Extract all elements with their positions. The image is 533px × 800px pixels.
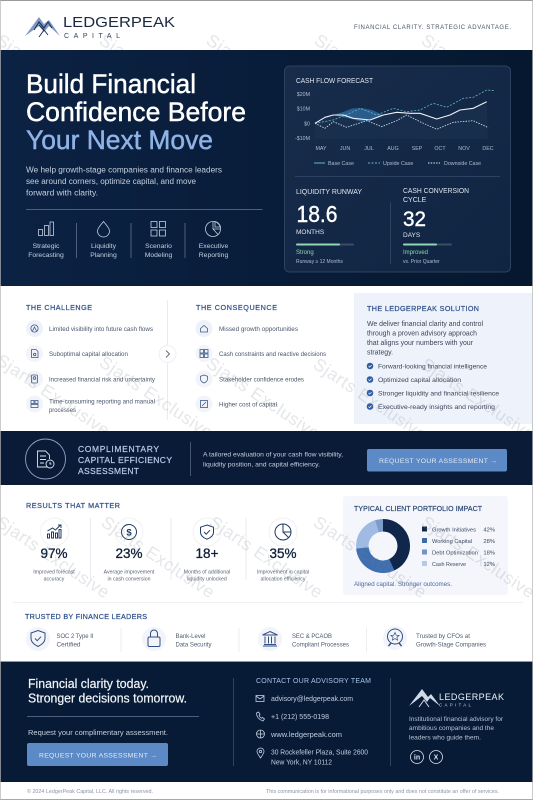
watermark: Sjarts Exclusive (206, 512, 326, 602)
panel: hero (0, 50, 533, 286)
legend: 18% (483, 550, 495, 556)
legend: scenarios: Base Case (328, 161, 354, 167)
feature: executive reporting (199, 222, 228, 259)
legend: 28% (483, 539, 495, 545)
logo (25, 14, 175, 40)
list: challenges: Suboptimal capital allocation (49, 351, 128, 358)
legend: 12% (483, 562, 495, 568)
feature: scenario modeling: Scenario (145, 243, 172, 250)
stat: 97%: Improved forecast (33, 570, 75, 576)
list: challenges: Limited visibility into future cash flows (49, 326, 154, 333)
contact details: advisory@ledgerpeak.com (271, 694, 353, 703)
stat: 35% (257, 518, 309, 582)
watermark (0, 30, 533, 602)
feature: liquidity planning (90, 222, 117, 259)
line chart: cash flow (295, 90, 495, 152)
watermark: Sjarts Exclusive (96, 30, 216, 120)
heading: trusted: TRUSTED BY FINANCE LEADERS (25, 612, 147, 621)
metric: cash conversion cycle: CASH CONVERSION (403, 188, 469, 195)
panel: assessment band (0, 431, 533, 485)
feature: scenario modeling: Modeling (145, 252, 173, 259)
line chart: cash flow: AUG (387, 146, 399, 152)
heading: the consequence: THE CONSEQUENCE (196, 303, 277, 312)
logo: LEDGERPEAK (63, 14, 175, 31)
title: Build Financial (26, 69, 196, 99)
intro text (26, 166, 222, 198)
heading: portfolio: TYPICAL CLIENT PORTFOLIO IMPACT (354, 506, 483, 513)
contact details: 30 Rockefeller Plaza, Suite 2600 (271, 748, 368, 756)
list: challenges: Time-consuming reporting and manual (49, 398, 156, 406)
stat: 18+ (184, 518, 230, 582)
stat: 23%: 23% (115, 546, 143, 561)
contact details: +1 (212) 555-0198 (271, 712, 329, 721)
list: solution benefits (367, 363, 499, 411)
social icons: in (414, 754, 420, 762)
metric: cash conversion cycle: CYCLE (403, 197, 427, 204)
call to action text: Request your complimentary assessment. (28, 730, 168, 737)
button: request assessment: REQUEST YOUR ASSESSMENT → (379, 458, 497, 465)
feature: scenario modeling (145, 222, 173, 259)
list: solution benefits: Stronger liquidity and financial resilience (378, 390, 499, 398)
contact details: CONTACT OUR ADVISORY TEAM (256, 678, 371, 685)
line chart: cash flow: NOV (458, 146, 470, 152)
stat: 35%: allocation efficiency (261, 576, 306, 582)
list: challenges: Increased financial risk and uncertainty (49, 376, 156, 384)
legend: 42% (483, 528, 495, 534)
stat: 97%: 97% (40, 546, 68, 561)
feature: liquidity planning: Liquidity (91, 243, 117, 250)
line chart: cash flow: SEP (412, 146, 423, 152)
text: solution description: that aligns your numbers with your (367, 340, 474, 347)
line chart: cash flow: JUL (364, 146, 374, 152)
watermark: Sjarts Exclusive (96, 352, 216, 442)
contact details: www.ledgerpeak.com (270, 730, 342, 739)
footer logo: LEDGERPEAK (439, 692, 504, 702)
list: challenges: processes (49, 407, 77, 414)
footer logo (409, 689, 504, 708)
panel: portfolio impact (343, 496, 508, 595)
title: Your Next Move (26, 125, 213, 155)
bottom legal bar: This communication is for informational purposes only and does not constitute an offer of services. (266, 789, 499, 795)
metric: cash conversion cycle (403, 188, 469, 265)
watermark: Sjarts Exclusive (203, 353, 323, 443)
metric: liquidity runway: Strong (296, 250, 314, 256)
feature: liquidity planning: Planning (90, 252, 117, 259)
footer logo: CAPITAL (439, 702, 471, 708)
legend: scenarios (314, 161, 481, 167)
watermark: Sjarts Exclusive (310, 512, 430, 602)
caption: Aligned capital. Stronger outcomes. (354, 582, 452, 588)
contact details (256, 678, 371, 766)
panel: trusted by finance leaders (13, 602, 523, 652)
metric: liquidity runway (296, 189, 362, 265)
stat: 23%: Average improvement (104, 570, 155, 576)
title (26, 69, 246, 155)
watermark: Sjarts Exclusive (310, 354, 430, 444)
closing statement: Stronger decisions tomorrow. (28, 692, 187, 706)
metric: cash conversion cycle: vs. Prior Quarter (403, 259, 440, 265)
text: solution description: strategy. (367, 350, 393, 356)
footer description: Institutional financial advisory for (409, 716, 503, 723)
badge: trusted by CFOs: Growth-Stage Companies (416, 642, 486, 648)
text: assessment description (203, 452, 343, 468)
intro text: see around corners, optimize capital, and move (26, 177, 197, 186)
badge: SOC 2: Certified (56, 642, 81, 648)
social icons: X (434, 754, 439, 762)
legend: Debt Optimization (432, 550, 478, 556)
badge: SOC 2 (26, 627, 94, 651)
badge: trusted by CFOs (383, 626, 486, 650)
feature: strategic forecasting: Forecasting (28, 252, 64, 259)
arrow: challenge to consequence (159, 346, 176, 362)
list: consequences: Cash constraints and reactive decisions (219, 351, 327, 358)
line chart: cash flow: MAY (315, 146, 327, 152)
badge: bank-level security: Bank-Level (176, 633, 206, 640)
icon: document clock (26, 439, 66, 479)
logo: CAPITAL (64, 33, 120, 40)
watermark: Sjarts Exclusive (98, 512, 218, 602)
panel: results that matter (0, 485, 533, 602)
metric: cash conversion cycle: DAYS (403, 232, 421, 239)
metric: cash conversion cycle: Improved (403, 250, 428, 256)
text: solution description: through a proven advisory approach (367, 330, 477, 338)
metric: cash conversion cycle: 32 (403, 208, 426, 231)
metric: liquidity runway: 18.6 (296, 201, 338, 227)
button: request assessment footer: REQUEST YOUR ASSESSMENT → (39, 752, 157, 760)
list: consequences: Stakeholder confidence erodes (219, 376, 305, 384)
text: assessment description: liquidity position, and capital efficiency. (203, 462, 320, 468)
stat: 97%: accuracy (44, 576, 65, 582)
legend: Working Capital (432, 539, 472, 545)
stat: 35%: 35% (269, 546, 297, 561)
badge: SEC and PCAOB: SEC & PCAOB (292, 633, 332, 640)
line chart: cash flow: $0 (304, 122, 310, 128)
feature: strategic forecasting (28, 222, 64, 259)
heading: complimentary assessment (78, 444, 172, 476)
line chart: cash flow: $20M (297, 92, 310, 98)
badge: bank-level security (142, 627, 212, 651)
stat: 35%: Improvement in capital (257, 570, 309, 576)
stat: 23%: $ (126, 528, 132, 538)
text: solution description: We deliver financial clarity and control (367, 321, 483, 328)
intro text: forward with clarity. (26, 188, 98, 198)
list: consequences: Higher cost of capital (219, 402, 278, 408)
list: solution benefits: Forward-looking financial intelligence (378, 364, 487, 370)
line chart: cash flow: OCT (434, 146, 446, 152)
badge: SOC 2: SOC 2 Type II (56, 633, 94, 640)
feature: strategic forecasting: Strategic (33, 243, 60, 250)
panel: the ledgerpeak solution (354, 293, 533, 424)
badge: trusted by CFOs: Trusted by CFOs at (416, 633, 470, 640)
legend: scenarios: Downside Case (444, 161, 481, 167)
stat: 23% (104, 518, 155, 582)
panel: challenge and consequence (0, 286, 533, 431)
metric: liquidity runway: Runway ≥ 12 Months (296, 259, 343, 265)
button: request assessment (367, 449, 507, 472)
text: solution description (367, 321, 483, 356)
heading: the challenge: THE CHALLENGE (26, 303, 92, 312)
badge: bank-level security: Data Security (176, 642, 212, 648)
intro text: We help growth-stage companies and finance leaders (26, 166, 222, 174)
metric: liquidity runway: LIQUIDITY RUNWAY (296, 189, 362, 196)
stat: 18+: 18+ (196, 546, 219, 561)
heading: results: RESULTS THAT MATTER (26, 501, 120, 510)
line chart: cash flow: -$10M (295, 136, 310, 142)
bottom legal bar (0, 782, 533, 800)
list: solution benefits: Executive-ready insights and reporting (378, 404, 495, 411)
footer description: ambitious companies and the (409, 725, 495, 732)
stat: 18+: Months of additional (184, 570, 230, 576)
stat: 23%: in cash conversion (108, 576, 151, 582)
header (0, 0, 533, 40)
list: challenges (26, 320, 156, 414)
panel: footer (0, 661, 533, 782)
line chart: cash flow: DEC (482, 146, 494, 152)
bottom legal bar: © 2024 LedgerPeak Capital, LLC. All rights reserved. (27, 788, 153, 795)
stat: 97% (33, 518, 75, 582)
heading: cash flow forecast: CASH FLOW FORECAST (296, 78, 374, 85)
closing statement (28, 677, 187, 706)
donut chart (362, 525, 404, 567)
badge: SEC and PCAOB (258, 627, 349, 651)
list: consequences: Missed growth opportunities (219, 326, 299, 333)
metric: liquidity runway: MONTHS (296, 229, 325, 236)
title: Confidence Before (26, 97, 246, 127)
legend: Growth Initiatives (432, 528, 476, 534)
footer description (409, 716, 503, 742)
stat: 18+: liquidity unlocked (187, 576, 227, 582)
heading: complimentary assessment: COMPLIMENTARY (78, 444, 159, 454)
button: request assessment footer (27, 743, 168, 766)
panel: forecast card (284, 66, 510, 272)
heading: solution: THE LEDGERPEAK SOLUTION (367, 304, 479, 313)
legend (422, 526, 495, 568)
badge: SEC and PCAOB: Compliant Processes (292, 642, 349, 648)
social icons (410, 750, 442, 764)
footer description: leaders who guide them. (409, 734, 481, 742)
list: consequences (196, 320, 327, 412)
legend: Cash Reserve (432, 562, 466, 568)
feature: executive reporting: Reporting (199, 252, 228, 259)
closing statement: Financial clarity today. (28, 677, 149, 691)
watermark: Sjarts Exclusive (203, 30, 323, 120)
legend: scenarios: Upside Case (383, 161, 413, 167)
list: solution benefits: Optimized capital allocation (378, 377, 461, 384)
contact details: New York, NY 10112 (271, 758, 332, 766)
line chart: cash flow: $10M (297, 106, 310, 112)
line chart: cash flow: JUN (340, 146, 350, 152)
feature: executive reporting: Executive (199, 243, 228, 250)
heading: complimentary assessment: CAPITAL EFFICIENCY (78, 455, 172, 465)
watermark: Sjarts Exclusive (311, 30, 431, 120)
heading: complimentary assessment: ASSESSMENT (78, 466, 139, 476)
text: assessment description: A tailored evaluation of your cash flow visibility, (203, 452, 343, 458)
tagline: FINANCIAL CLARITY. STRATEGIC ADVANTAGE. (354, 25, 511, 31)
